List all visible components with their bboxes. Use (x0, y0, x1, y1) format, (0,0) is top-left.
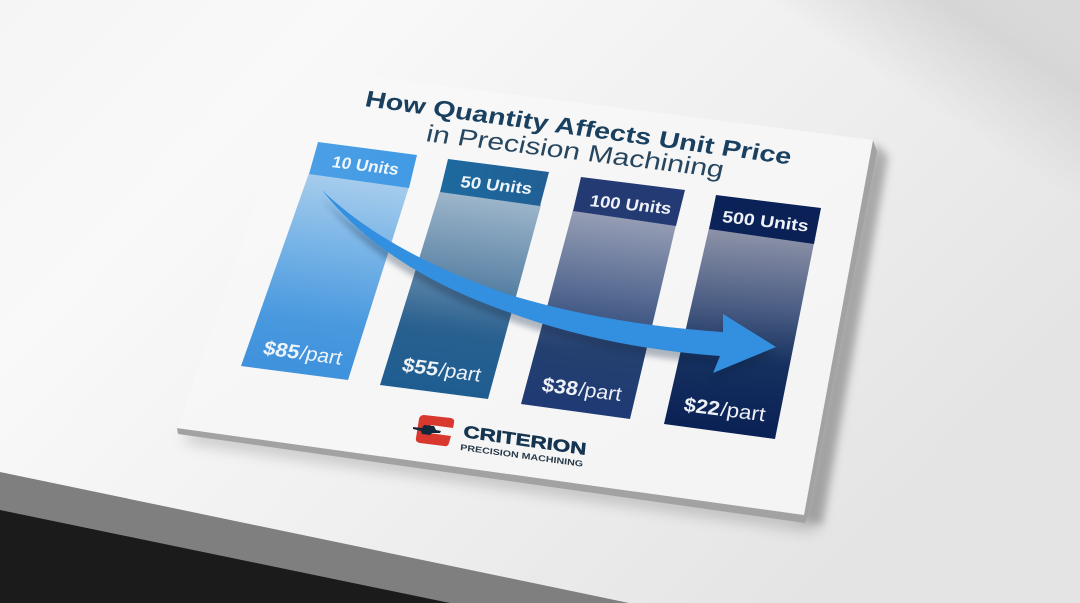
card shadow (185, 160, 880, 530)
price: $38/part: $38 (540, 374, 580, 400)
icon: red C mark (413, 415, 454, 446)
title (363, 86, 794, 183)
arrow shadow (322, 198, 776, 381)
price: $22/part: $22 (682, 394, 722, 420)
price: $55/part: /part (436, 360, 484, 387)
price: $55/part: $55 (400, 355, 441, 381)
bar header (440, 159, 549, 206)
heading line 1: How Quantity Affects Unit Price (363, 86, 794, 169)
price: $85/part: /part (297, 343, 345, 370)
label: 10 Units: 10 Units (330, 153, 401, 179)
bar body (241, 173, 409, 380)
price: $22/part (682, 394, 768, 426)
panel: printed card (177, 68, 873, 515)
bar: 10 units (241, 142, 417, 380)
bar: 100 units (521, 177, 685, 419)
bar body (664, 228, 814, 439)
bar body (521, 210, 676, 419)
price: $38/part (540, 374, 624, 406)
label: 100 Units: 100 Units (588, 192, 673, 218)
price: $85/part (261, 338, 345, 370)
price: $38/part: /part (577, 379, 624, 406)
price: $22/part: /part (719, 399, 768, 426)
wordmark: CRITERION (463, 422, 587, 459)
card thickness (177, 140, 877, 523)
dark floor below table (0, 510, 450, 603)
bar body (380, 191, 541, 399)
bar header (573, 177, 685, 226)
bar header (309, 142, 417, 188)
table front edge (0, 472, 629, 603)
bar: 50 units (380, 159, 549, 399)
label: 500 Units: 500 Units (721, 208, 810, 236)
arrow: falling unit price (322, 190, 776, 373)
logo: Criterion Precision Machining (413, 415, 587, 469)
bar header (709, 195, 821, 244)
price: $55/part (400, 355, 484, 387)
card right edge shadow (805, 142, 888, 525)
price: $85/part: $85 (261, 338, 302, 364)
label: 50 Units: 50 Units (459, 173, 534, 198)
heading line 2: in Precision Machining (424, 120, 727, 183)
bar: 500 units (664, 195, 821, 439)
tagline: PRECISION MACHINING (460, 442, 584, 469)
